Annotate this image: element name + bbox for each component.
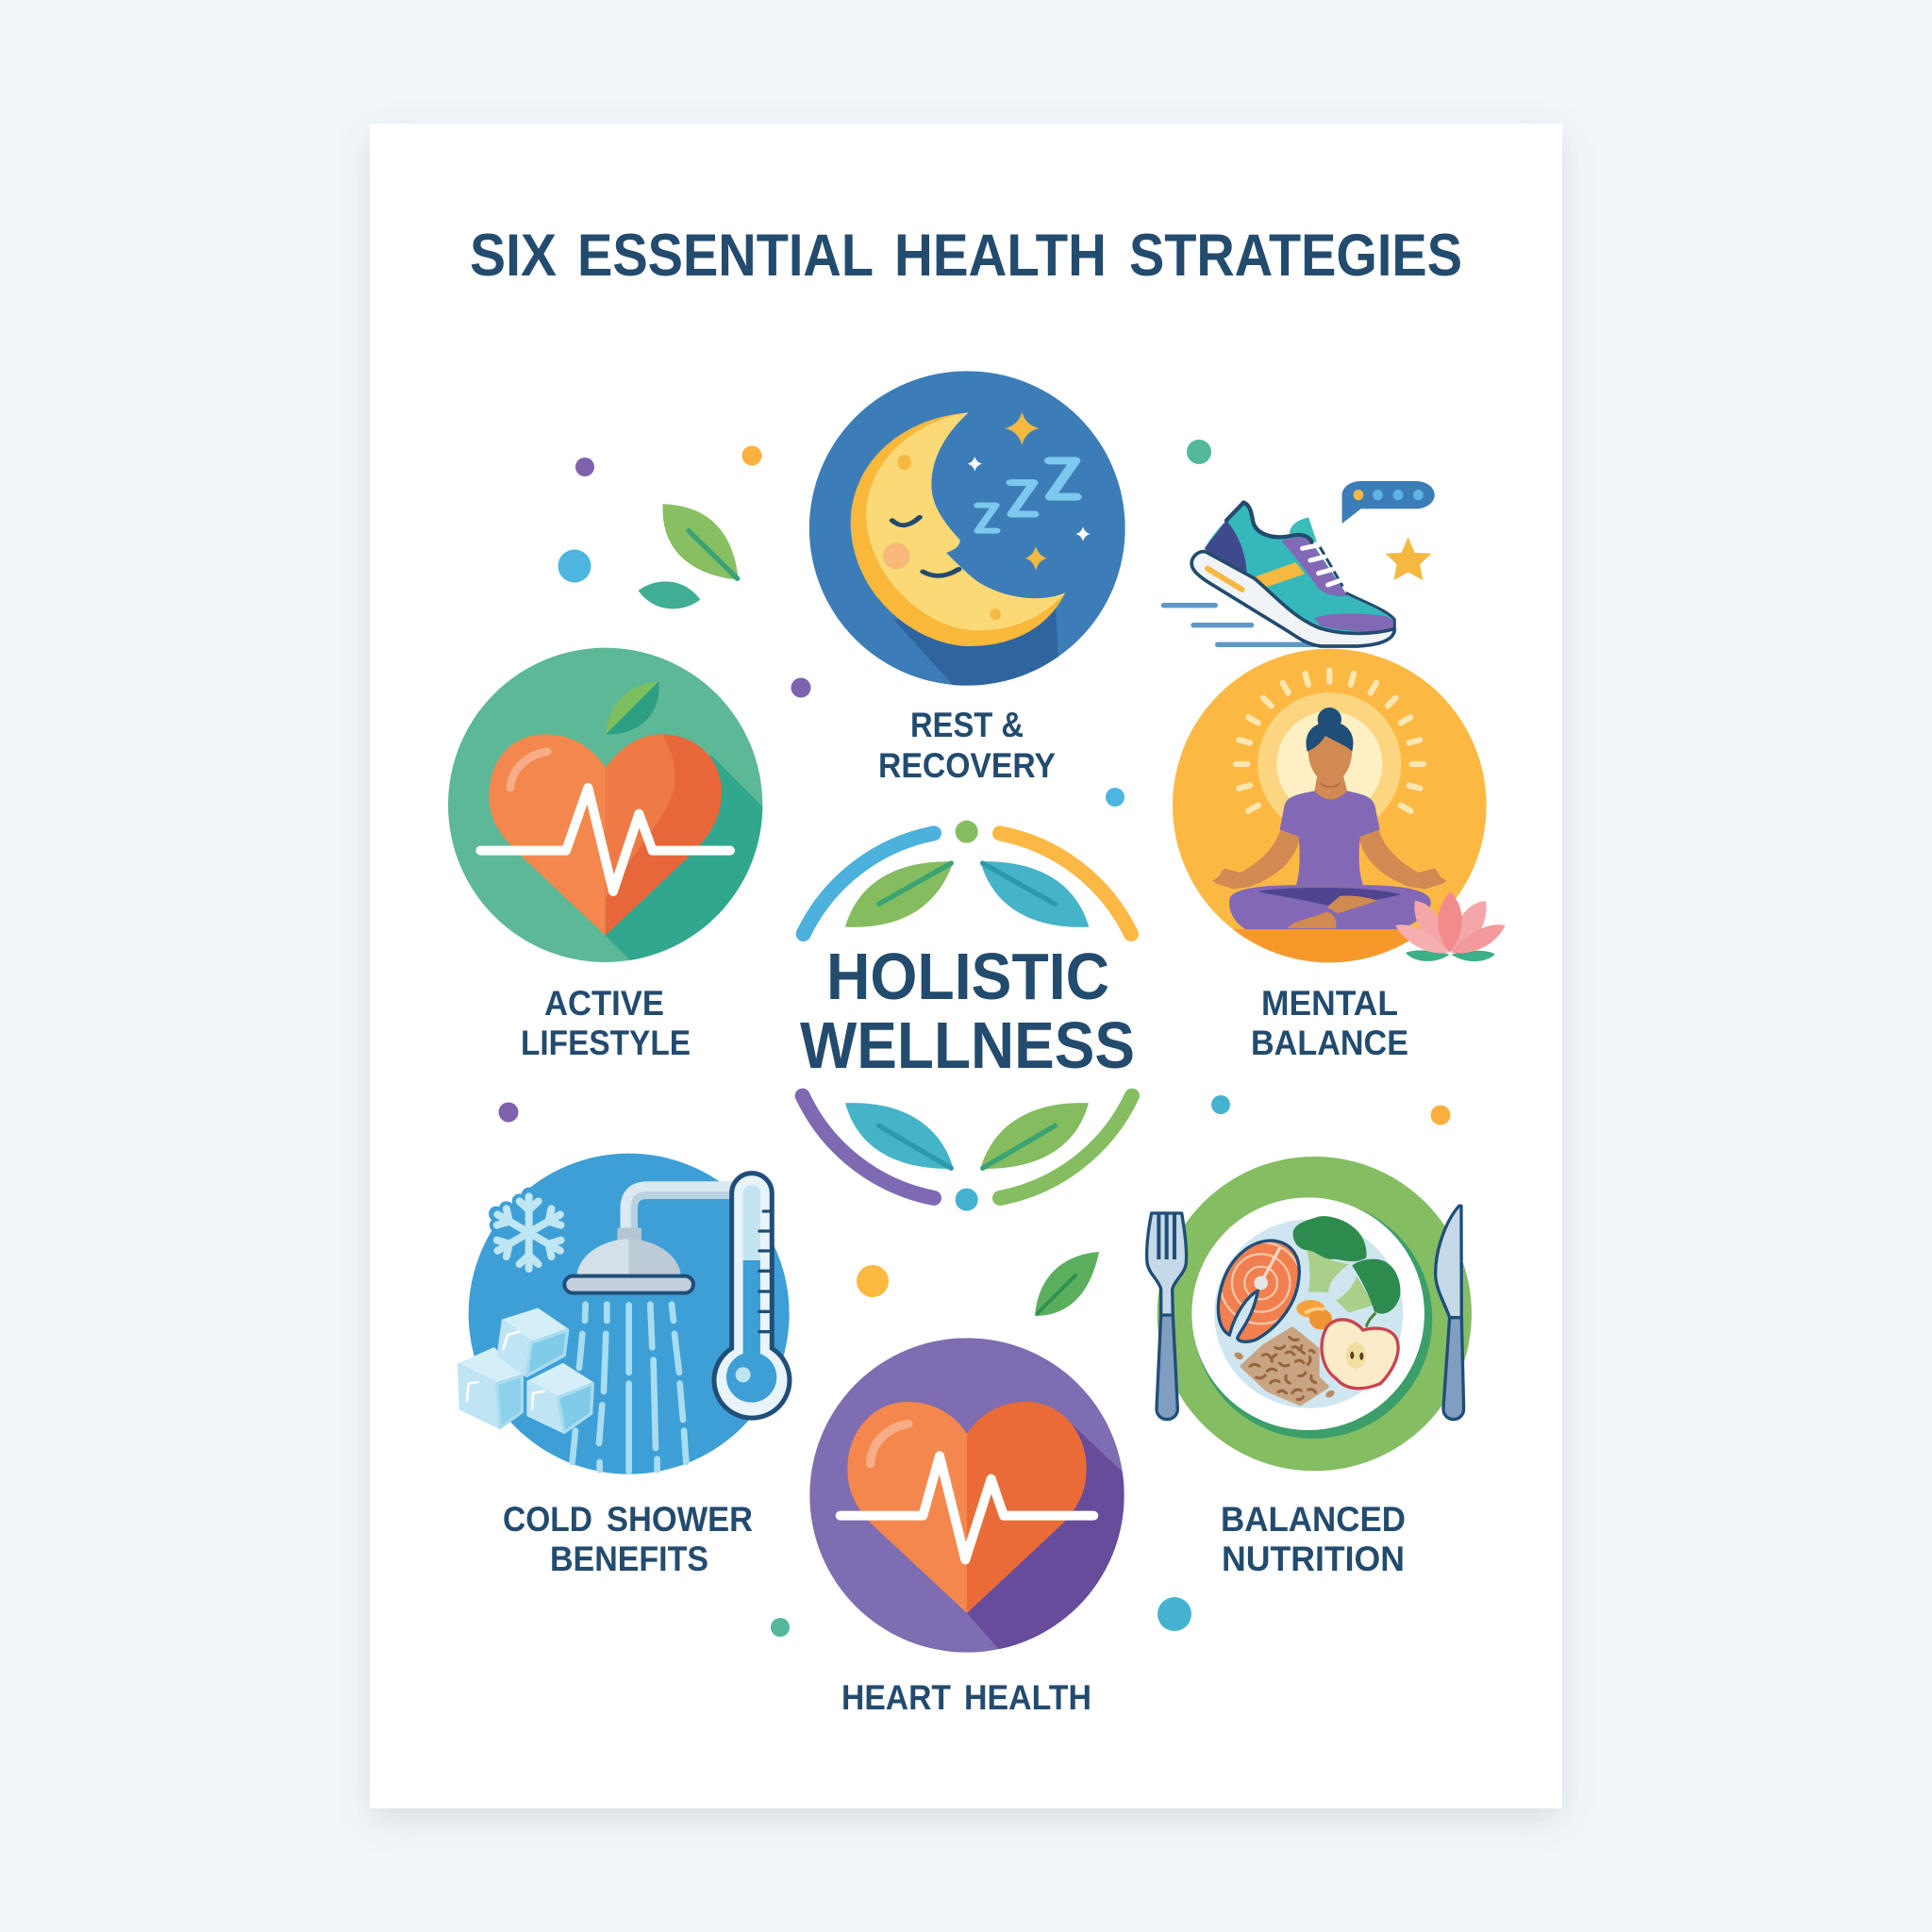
icon: plate balanced nutrition	[1147, 1157, 1472, 1471]
icon: apple heart active lifestyle	[448, 648, 767, 965]
icon: meditating person mental balance	[1170, 649, 1491, 967]
label: balanced nutrition: NUTRITION	[1222, 1540, 1405, 1578]
title: HEALTH	[894, 223, 1107, 289]
title: ESSENTIAL	[577, 223, 874, 289]
apricots	[1296, 1300, 1332, 1329]
label: rest and recovery: REST &	[910, 706, 1024, 744]
ice cubes	[459, 1309, 592, 1432]
label: active lifestyle: ACTIVE	[544, 984, 664, 1023]
emblem heading: WELLNESS	[800, 1008, 1135, 1082]
broccoli	[1293, 1216, 1401, 1314]
salmon	[1218, 1241, 1302, 1341]
label: cold shower benefits: SHOWER	[607, 1500, 753, 1539]
label: mental balance	[1251, 984, 1408, 1062]
icon: heart with pulse	[809, 1338, 1129, 1654]
fork	[1147, 1213, 1187, 1420]
emblem heading: HOLISTIC	[826, 940, 1109, 1013]
label: balanced nutrition	[1221, 1500, 1406, 1578]
label: mental balance: BALANCE	[1251, 1024, 1408, 1062]
grains	[1233, 1328, 1336, 1404]
label: active lifestyle	[521, 984, 691, 1062]
emblem arcs and leaves	[803, 821, 1132, 1211]
snowflake	[491, 1195, 566, 1271]
poster	[362, 124, 1570, 1827]
label: cold shower benefits: BENEFITS	[550, 1540, 708, 1578]
label: heart health: HEALTH	[964, 1678, 1091, 1717]
paper panel	[370, 124, 1562, 1808]
decorative leaf lower	[1035, 1252, 1099, 1316]
title	[470, 223, 1462, 289]
thermometer	[714, 1174, 790, 1418]
label: rest and recovery: RECOVERY	[878, 746, 1056, 785]
icon: speech bubble	[1342, 481, 1435, 524]
label: rest and recovery	[878, 706, 1056, 785]
label: cold shower benefits	[503, 1500, 753, 1578]
label: heart health	[841, 1678, 1091, 1717]
icon: running shoe	[1163, 503, 1394, 646]
label: active lifestyle: LIFESTYLE	[521, 1024, 691, 1062]
title: STRATEGIES	[1129, 223, 1462, 289]
label: mental balance: MENTAL	[1261, 984, 1398, 1023]
label: balanced nutrition: BALANCED	[1221, 1500, 1406, 1539]
scattered dots	[498, 440, 1451, 1637]
icon: star	[1386, 537, 1432, 580]
icon: lotus flower	[1395, 891, 1506, 961]
icon: cold shower	[459, 1154, 790, 1474]
central emblem: holistic wellness	[800, 821, 1135, 1211]
shower head	[564, 1187, 733, 1293]
icon: crescent moon rest and recovery	[809, 371, 1125, 687]
label: heart health: HEART	[841, 1678, 951, 1717]
emblem heading	[800, 940, 1135, 1082]
label: cold shower benefits: COLD	[503, 1500, 592, 1539]
title: SIX	[470, 223, 557, 289]
decorative leaves top left	[639, 504, 739, 608]
knife	[1436, 1206, 1464, 1420]
apple	[1322, 1313, 1398, 1389]
water streams	[573, 1305, 686, 1472]
